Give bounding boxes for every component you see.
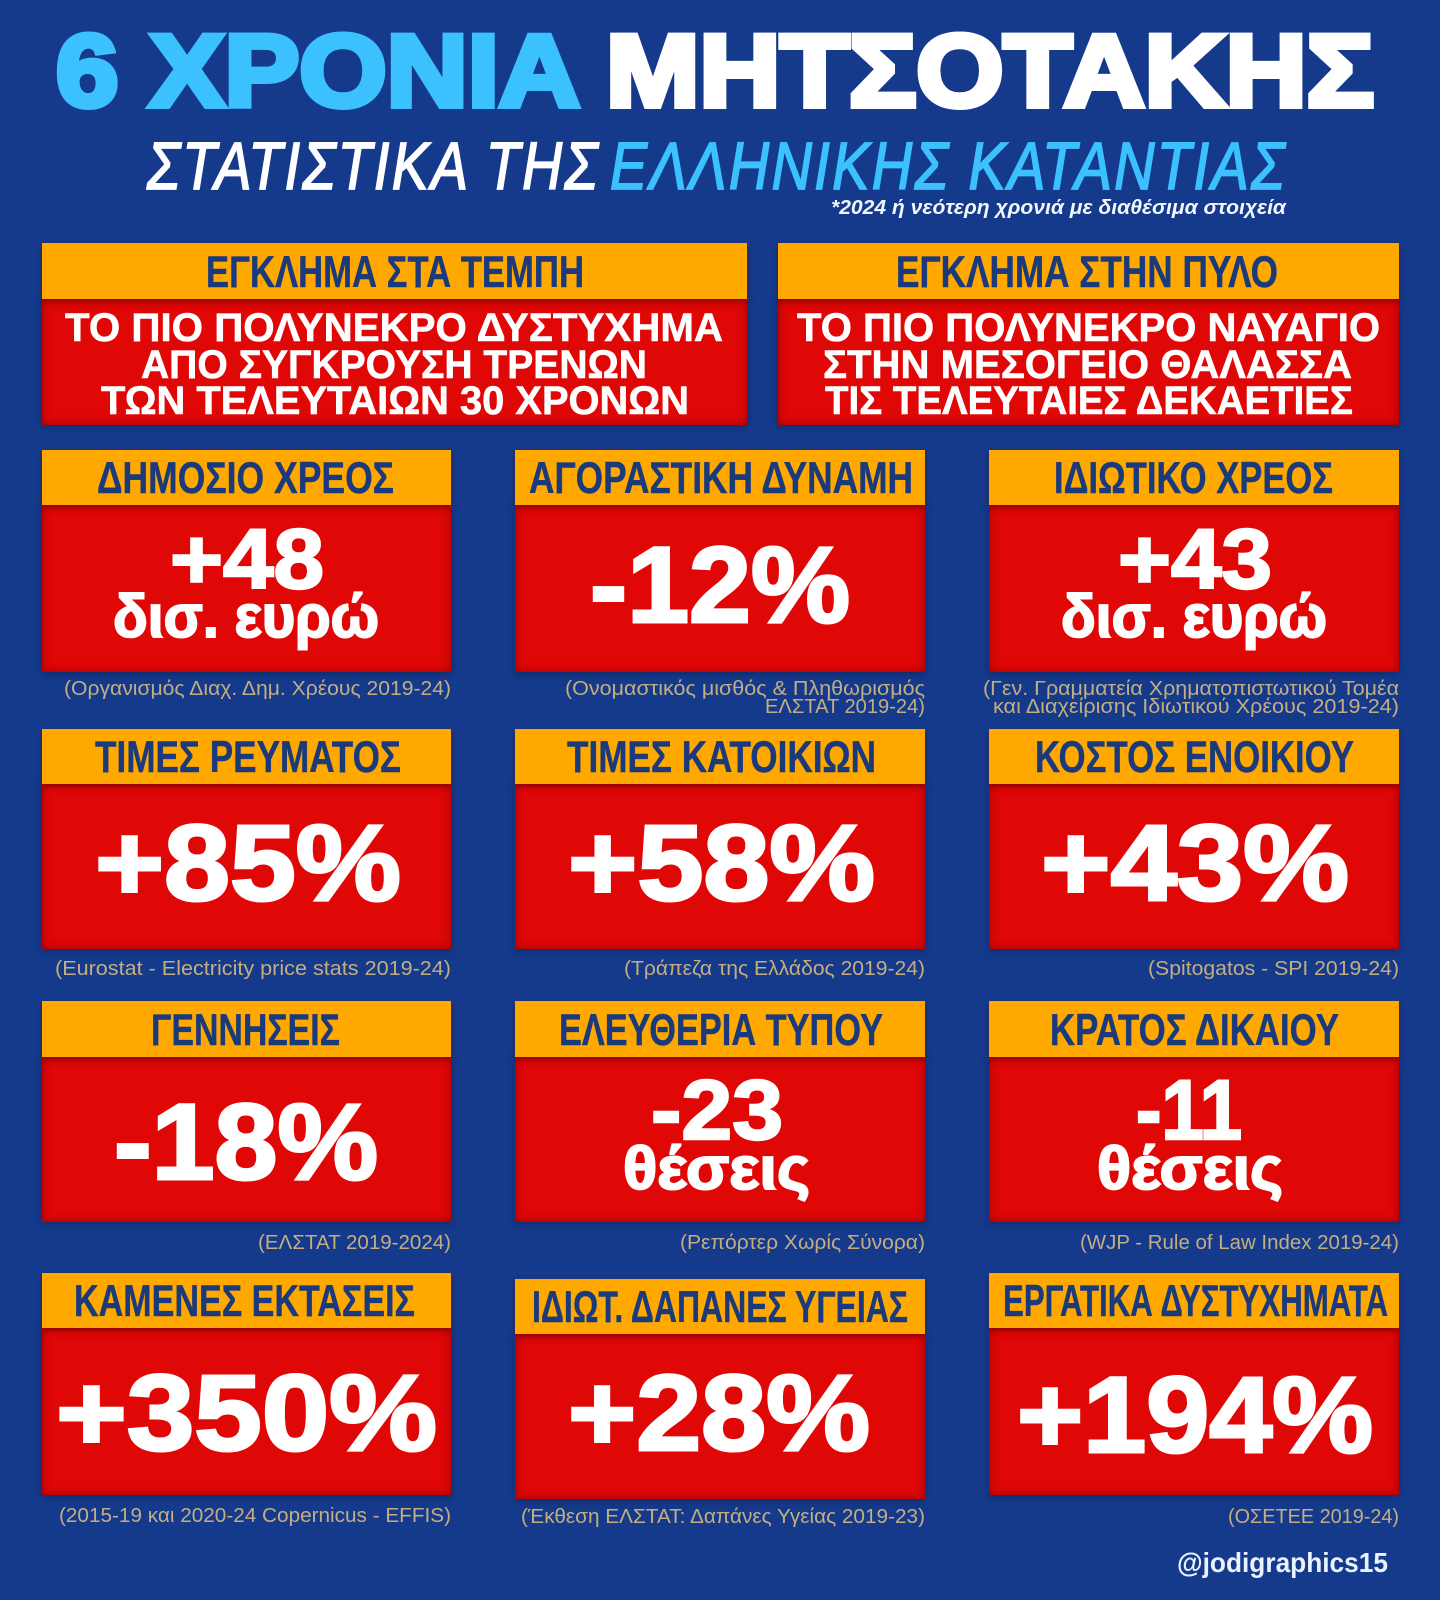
value: +58% bbox=[568, 802, 875, 923]
source bbox=[983, 677, 1399, 718]
heading: ΤΙΜΕΣ ΚΑΤΟΙΚΙΩΝ bbox=[567, 733, 876, 782]
panel: Τιμές ρεύματος bbox=[42, 729, 451, 980]
credit handle: @jodigraphics15 bbox=[1177, 1547, 1388, 1578]
panel: Δημόσιο χρέος bbox=[42, 450, 451, 700]
source: (Τράπεζα της Ελλάδος 2019-24) bbox=[624, 957, 925, 980]
value bbox=[1061, 512, 1327, 650]
heading: ΕΓΚΛΗΜΑ ΣΤΑ ΤΕΜΠΗ bbox=[206, 248, 584, 297]
heading: ΙΔΙΩΤΙΚΟ ΧΡΕΟΣ bbox=[1054, 454, 1333, 503]
text block: ΑΠΟ ΣΥΓΚΡΟΥΣΗ ΤΡΕΝΩΝ bbox=[141, 343, 647, 387]
value: θέσεις bbox=[1097, 1135, 1283, 1202]
panel: Ελευθερία τύπου bbox=[515, 1001, 925, 1254]
source: ΕΛΣΤΑΤ 2019-24) bbox=[765, 695, 925, 718]
value: -11 bbox=[1136, 1063, 1242, 1157]
source: και Διαχείρισης Ιδιωτικού Χρέους 2019-24) bbox=[993, 695, 1399, 718]
value bbox=[623, 1063, 810, 1202]
title: ΜΗΤΣΟΤΑΚΗΣ bbox=[606, 14, 1374, 128]
value: +43% bbox=[1041, 802, 1349, 923]
panel: Καμένες εκτάσεις bbox=[42, 1273, 451, 1527]
panel: Πύλος bbox=[778, 243, 1399, 425]
heading: ΓΕΝΝΗΣΕΙΣ bbox=[151, 1006, 340, 1055]
text block: ΤΟ ΠΙΟ ΠΟΛΥΝΕΚΡΟ ΝΑΥΑΓΙΟ bbox=[797, 306, 1380, 350]
value: δισ. ευρώ bbox=[1061, 583, 1327, 650]
subtitle bbox=[146, 129, 1287, 204]
source: (Spitogatos - SPI 2019-24) bbox=[1148, 957, 1399, 980]
text block: ΤΩΝ ΤΕΛΕΥΤΑΙΩΝ 30 ΧΡΟΝΩΝ bbox=[101, 379, 689, 423]
heading: ΑΓΟΡΑΣΤΙΚΗ ΔΥΝΑΜΗ bbox=[529, 454, 913, 503]
source: (WJP - Rule of Law Index 2019-24) bbox=[1080, 1231, 1399, 1254]
value: +350% bbox=[56, 1352, 437, 1473]
panel: Ιδιωτικές δαπάνες υγείας bbox=[515, 1279, 925, 1528]
source: (Γεν. Γραμματεία Χρηματοπιστωτικού Τομέα bbox=[983, 677, 1399, 700]
heading: ΤΙΜΕΣ ΡΕΥΜΑΤΟΣ bbox=[95, 733, 401, 782]
heading: ΙΔΙΩΤ. ΔΑΠΑΝΕΣ ΥΓΕΙΑΣ bbox=[532, 1283, 908, 1332]
source: (2015-19 και 2020-24 Copernicus - EFFIS) bbox=[59, 1504, 451, 1527]
title: 6 ΧΡΟΝΙΑ bbox=[56, 14, 580, 128]
value: +85% bbox=[95, 802, 401, 923]
subtitle: ΕΛΛΗΝΙΚΗΣ ΚΑΤΑΝΤΙΑΣ bbox=[610, 129, 1287, 204]
panel: Κράτος δικαίου bbox=[989, 1001, 1399, 1254]
panel: Κόστος ενοικίου bbox=[989, 729, 1399, 980]
value bbox=[1097, 1063, 1283, 1202]
panel: Αγοραστική δύναμη bbox=[515, 450, 925, 718]
value: -23 bbox=[651, 1063, 783, 1157]
source: (Ονομαστικός μισθός & Πληθωρισμός bbox=[565, 677, 925, 700]
panel: Γεννήσεις bbox=[42, 1001, 451, 1254]
value: +48 bbox=[170, 512, 324, 606]
value: +194% bbox=[1017, 1354, 1373, 1475]
panel: Ιδιωτικό χρέος bbox=[983, 450, 1399, 718]
text block: ΤΙΣ ΤΕΛΕΥΤΑΙΕΣ ΔΕΚΑΕΤΙΕΣ bbox=[825, 379, 1353, 423]
text block bbox=[797, 306, 1380, 423]
title bbox=[56, 14, 1374, 128]
source: (Eurostat - Electricity price stats 2019-24) bbox=[55, 957, 451, 980]
text block: ΣΤΗΝ ΜΕΣΟΓΕΙΟ ΘΑΛΑΣΣΑ bbox=[823, 343, 1352, 387]
heading: ΕΓΚΛΗΜΑ ΣΤΗΝ ΠΥΛΟ bbox=[896, 248, 1278, 297]
source: (Ρεπόρτερ Χωρίς Σύνορα) bbox=[680, 1231, 925, 1254]
panel: Τιμές κατοικιών bbox=[515, 729, 925, 980]
panel: Εργατικά δυστυχήματα bbox=[989, 1273, 1399, 1528]
value bbox=[113, 512, 379, 650]
value: θέσεις bbox=[623, 1135, 810, 1202]
value: δισ. ευρώ bbox=[113, 583, 379, 650]
source: (ΕΛΣΤΑΤ 2019-2024) bbox=[258, 1231, 451, 1254]
text block bbox=[65, 306, 723, 423]
value: -12% bbox=[590, 524, 850, 645]
source: (Έκθεση ΕΛΣΤΑΤ: Δαπάνες Υγείας 2019-23) bbox=[521, 1505, 925, 1528]
heading: ΔΗΜΟΣΙΟ ΧΡΕΟΣ bbox=[97, 454, 394, 503]
text block: ΤΟ ΠΙΟ ΠΟΛΥΝΕΚΡΟ ΔΥΣΤΥΧΗΜΑ bbox=[65, 306, 723, 350]
source bbox=[565, 677, 925, 718]
footnote: *2024 ή νεότερη χρονιά με διαθέσιμα στοιχεία bbox=[831, 197, 1288, 219]
value: -18% bbox=[114, 1081, 378, 1202]
heading: ΚΡΑΤΟΣ ΔΙΚΑΙΟΥ bbox=[1050, 1006, 1339, 1055]
value: +28% bbox=[568, 1352, 870, 1473]
heading: ΚΟΣΤΟΣ ΕΝΟΙΚΙΟΥ bbox=[1035, 733, 1354, 782]
source: (Οργανισμός Διαχ. Δημ. Χρέους 2019-24) bbox=[64, 677, 451, 700]
panel: Τέμπη bbox=[42, 243, 747, 425]
subtitle: ΣΤΑΤΙΣΤΙΚΑ ΤΗΣ bbox=[146, 129, 600, 204]
value: +43 bbox=[1118, 512, 1272, 606]
heading: ΚΑΜΕΝΕΣ ΕΚΤΑΣΕΙΣ bbox=[74, 1277, 415, 1326]
heading: ΕΛΕΥΘΕΡΙΑ ΤΥΠΟΥ bbox=[559, 1006, 883, 1055]
source: (ΟΣΕΤΕΕ 2019-24) bbox=[1228, 1505, 1399, 1528]
